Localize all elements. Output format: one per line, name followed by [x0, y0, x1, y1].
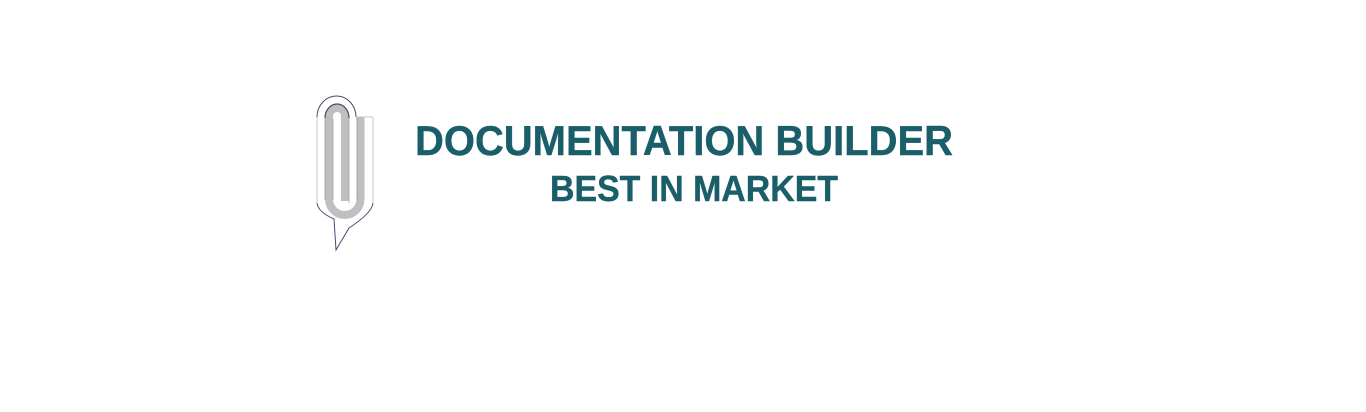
icon: paperclip speech bubble logo [317, 96, 373, 250]
title: DOCUMENTATION BUILDER [415, 117, 953, 164]
subtitle: BEST IN MARKET [550, 168, 838, 209]
